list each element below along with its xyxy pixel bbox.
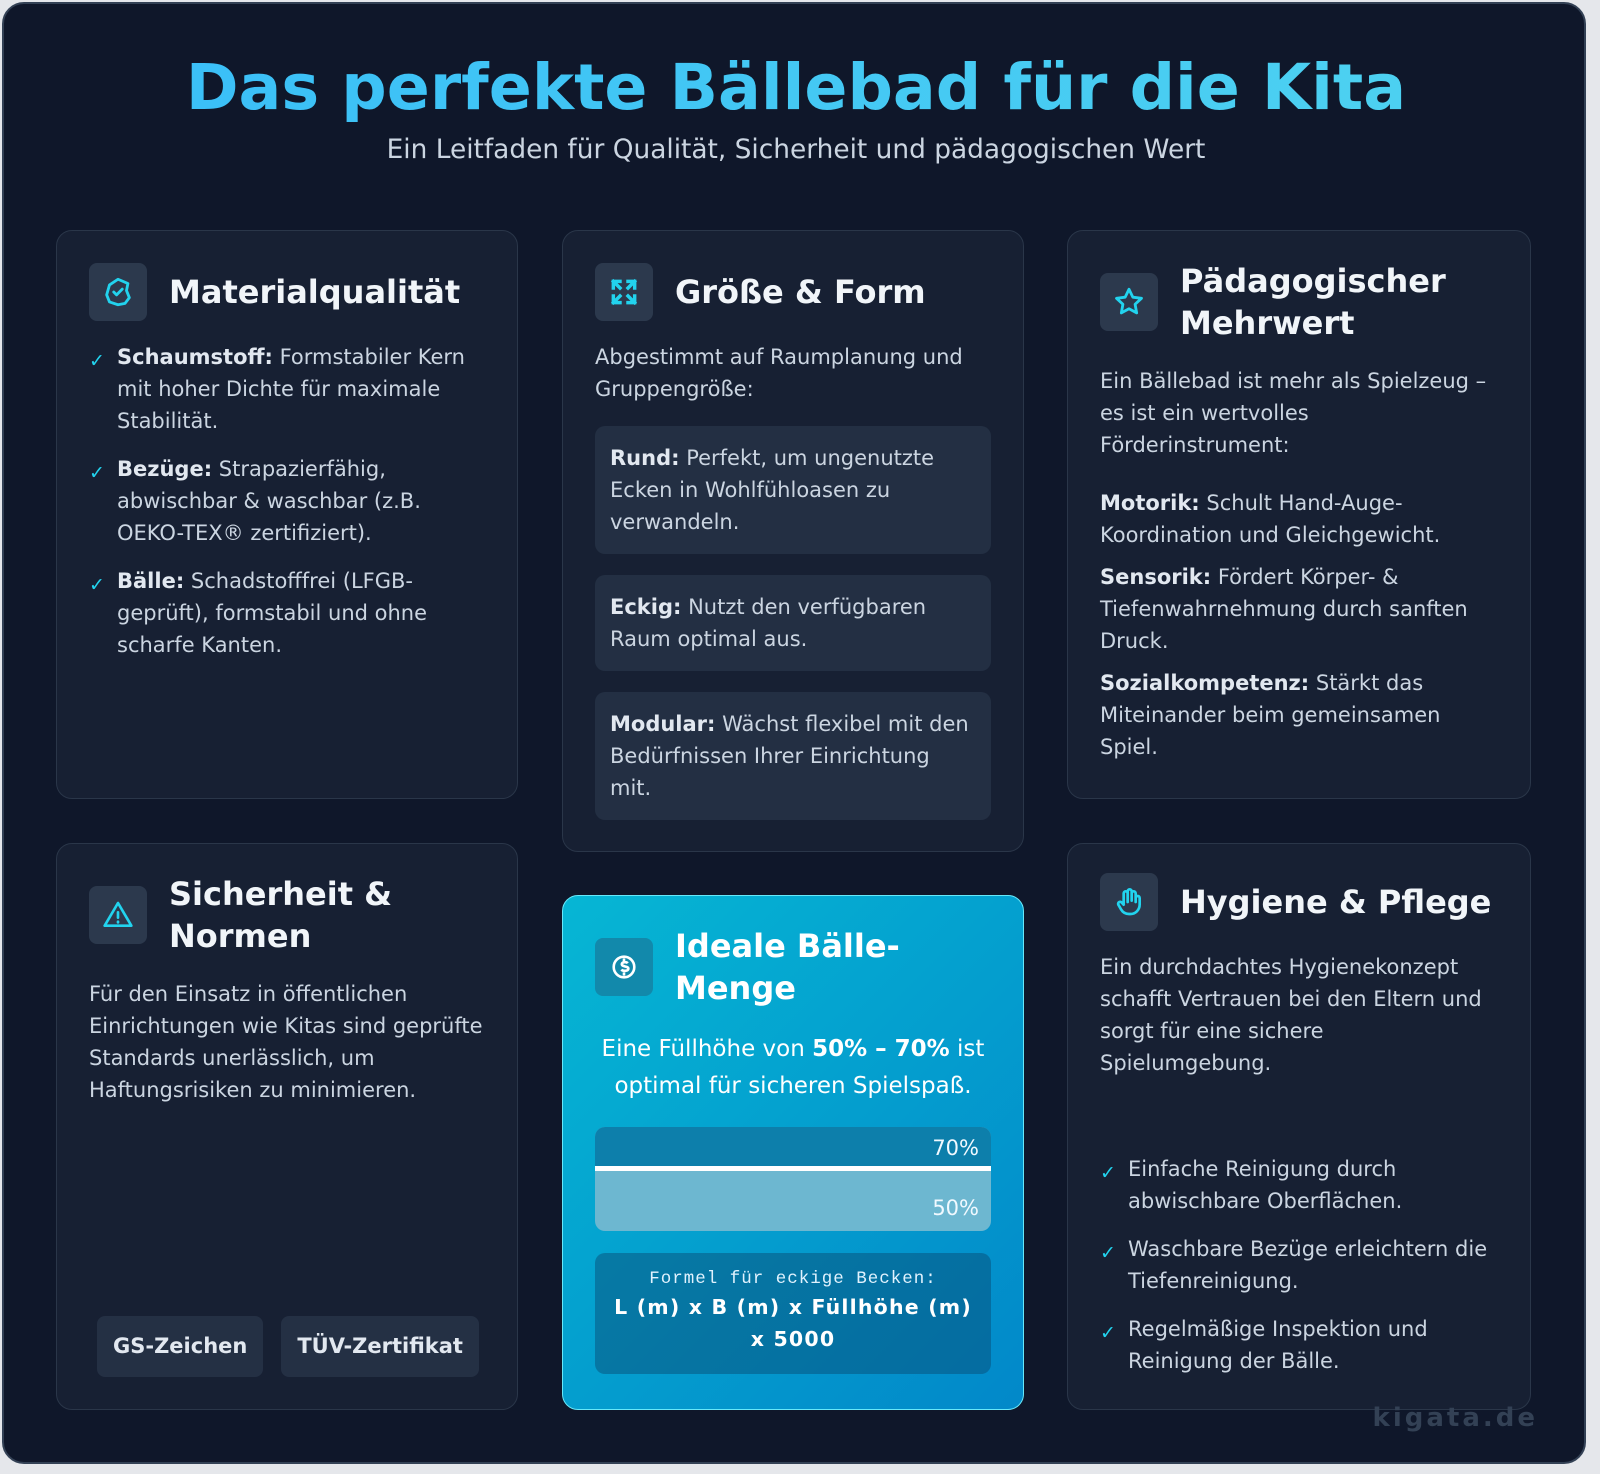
heading: Ideale Bälle-Menge: Ideale Bälle- [675, 927, 900, 965]
icon: coin [595, 938, 653, 996]
panel: Größe & Form [562, 230, 1024, 852]
chart: fill level bar [595, 1127, 991, 1231]
formula box [595, 1253, 991, 1374]
badge: GS-Zeichen [97, 1316, 263, 1377]
box: Rund: Rund: Perfekt, um ungenutzte Ecken in Wohlfühloasen zu verwandeln. [610, 446, 934, 534]
panel: Sicherheit & Normen [56, 843, 518, 1410]
heading: Sicherheit & Normen: Normen [169, 917, 311, 955]
badge: GS-Zeichen: GS-Zeichen [113, 1334, 247, 1358]
heading: Größe & Form: Größe & Form [675, 273, 926, 311]
heading: Sicherheit & Normen [89, 875, 392, 955]
item: Sozialkompetenz: Sozialkompetenz: Stärkt das Miteinander beim gemeinsamen Spiel. [1100, 671, 1440, 759]
box: Modular [595, 692, 991, 820]
checklist [1102, 1157, 1487, 1373]
formula box: x 5000 [751, 1327, 835, 1351]
label 70%: 70% [932, 1136, 979, 1160]
checklist: Bälle: Schadstofffrei (LFGB-geprüft), formstabil und ohne scharfe Kanten. [117, 569, 427, 657]
item: Motorik: Motorik: Schult Hand-Auge-Koordination und Gleichgewicht. [1100, 491, 1440, 547]
panel: Ideale Bälle-Menge [562, 895, 1024, 1410]
badge: TÜV-Zertifikat [281, 1316, 479, 1377]
heading: Ideale Bälle-Menge [595, 927, 900, 1007]
badges [97, 1316, 479, 1377]
panel: Materialqualität [56, 230, 518, 799]
intro text: Ein Bällebad ist mehr als Spielzeug – es ist ein wertvolles Förderinstrument: [1100, 369, 1486, 457]
label 50%: 50% [932, 1196, 979, 1220]
checklist: Bezüge: Strapazierfähig, abwischbar & waschbar (z.B. OEKO-TEX® zertifiziert). [117, 457, 421, 545]
icon: warning [89, 886, 147, 944]
text: Für den Einsatz in öffentlichen Einrichtungen wie Kitas sind geprüfte Standards unerlässlich, um Haftungsrisiken zu minimieren. [89, 982, 483, 1102]
badge: TÜV-Zertifikat: TÜV-Zertifikat [297, 1334, 463, 1358]
intro text: Abgestimmt auf Raumplanung und Gruppengröße: [595, 345, 963, 401]
item: Sensorik: Sensorik: Fördert Körper- & Tiefenwahrnehmung durch sanften Druck. [1100, 565, 1468, 653]
heading: Sicherheit & Normen: Sicherheit & [169, 875, 392, 913]
checklist: Einfache Reinigung durch abwischbare Oberflächen. [1128, 1157, 1402, 1213]
box: Eckig: Eckig: Nutzt den verfügbaren Raum optimal aus. [610, 595, 926, 651]
formula box: Formel für eckige Becken: [649, 1269, 937, 1289]
icon: expand arrows [595, 263, 653, 321]
box: Eckig [595, 575, 991, 671]
panel: Hygiene & Pflege [1067, 843, 1531, 1410]
heading: Hygiene & Pflege: Hygiene & Pflege [1180, 883, 1491, 921]
subtitle: Ein Leitfaden für Qualität, Sicherheit und pädagogischen Wert [387, 134, 1205, 165]
checklist: Schaumstoff: Formstabiler Kern mit hoher Dichte für maximale Stabilität. [117, 345, 465, 433]
panel: Pädagogischer Mehrwert [1067, 230, 1531, 799]
watermark: kigata.de [1373, 1403, 1538, 1433]
title: Das perfekte Bällebad für die Kita [186, 50, 1406, 124]
icon: star [1100, 273, 1158, 331]
icon: shield [89, 263, 147, 321]
text: Füllhöhe: Eine Füllhöhe von 50% – 70% ist optimal für sicheren Spielspaß. [602, 1036, 984, 1099]
icon: hand [1100, 873, 1158, 931]
heading: Ideale Bälle-Menge: Menge [675, 969, 796, 1007]
heading: Größe & Form [595, 263, 926, 321]
checklist [92, 345, 465, 657]
formula box: L (m) x B (m) x Füllhöhe (m) [614, 1295, 972, 1319]
checklist: Regelmäßige Inspektion und Reinigung der Bälle. [1128, 1317, 1428, 1373]
box: Rund [595, 426, 991, 554]
heading: Pädagogischer Mehrwert: Pädagogischer [1180, 262, 1446, 300]
heading: Hygiene & Pflege [1100, 873, 1491, 931]
heading: Pädagogischer Mehrwert: Mehrwert [1180, 304, 1354, 342]
text: Ein durchdachtes Hygienekonzept schafft Vertrauen bei den Eltern und sorgt für eine sichere Spielumgebung. [1100, 955, 1482, 1075]
heading: Pädagogischer Mehrwert [1100, 262, 1446, 342]
checklist: Waschbare Bezüge erleichtern die Tiefenreinigung. [1128, 1237, 1487, 1293]
box: Modular: Modular: Wächst flexibel mit den Bedürfnissen Ihrer Einrichtung mit. [610, 712, 969, 800]
heading: Materialqualität [89, 263, 460, 321]
heading: Materialqualität: Materialqualität [169, 273, 460, 311]
